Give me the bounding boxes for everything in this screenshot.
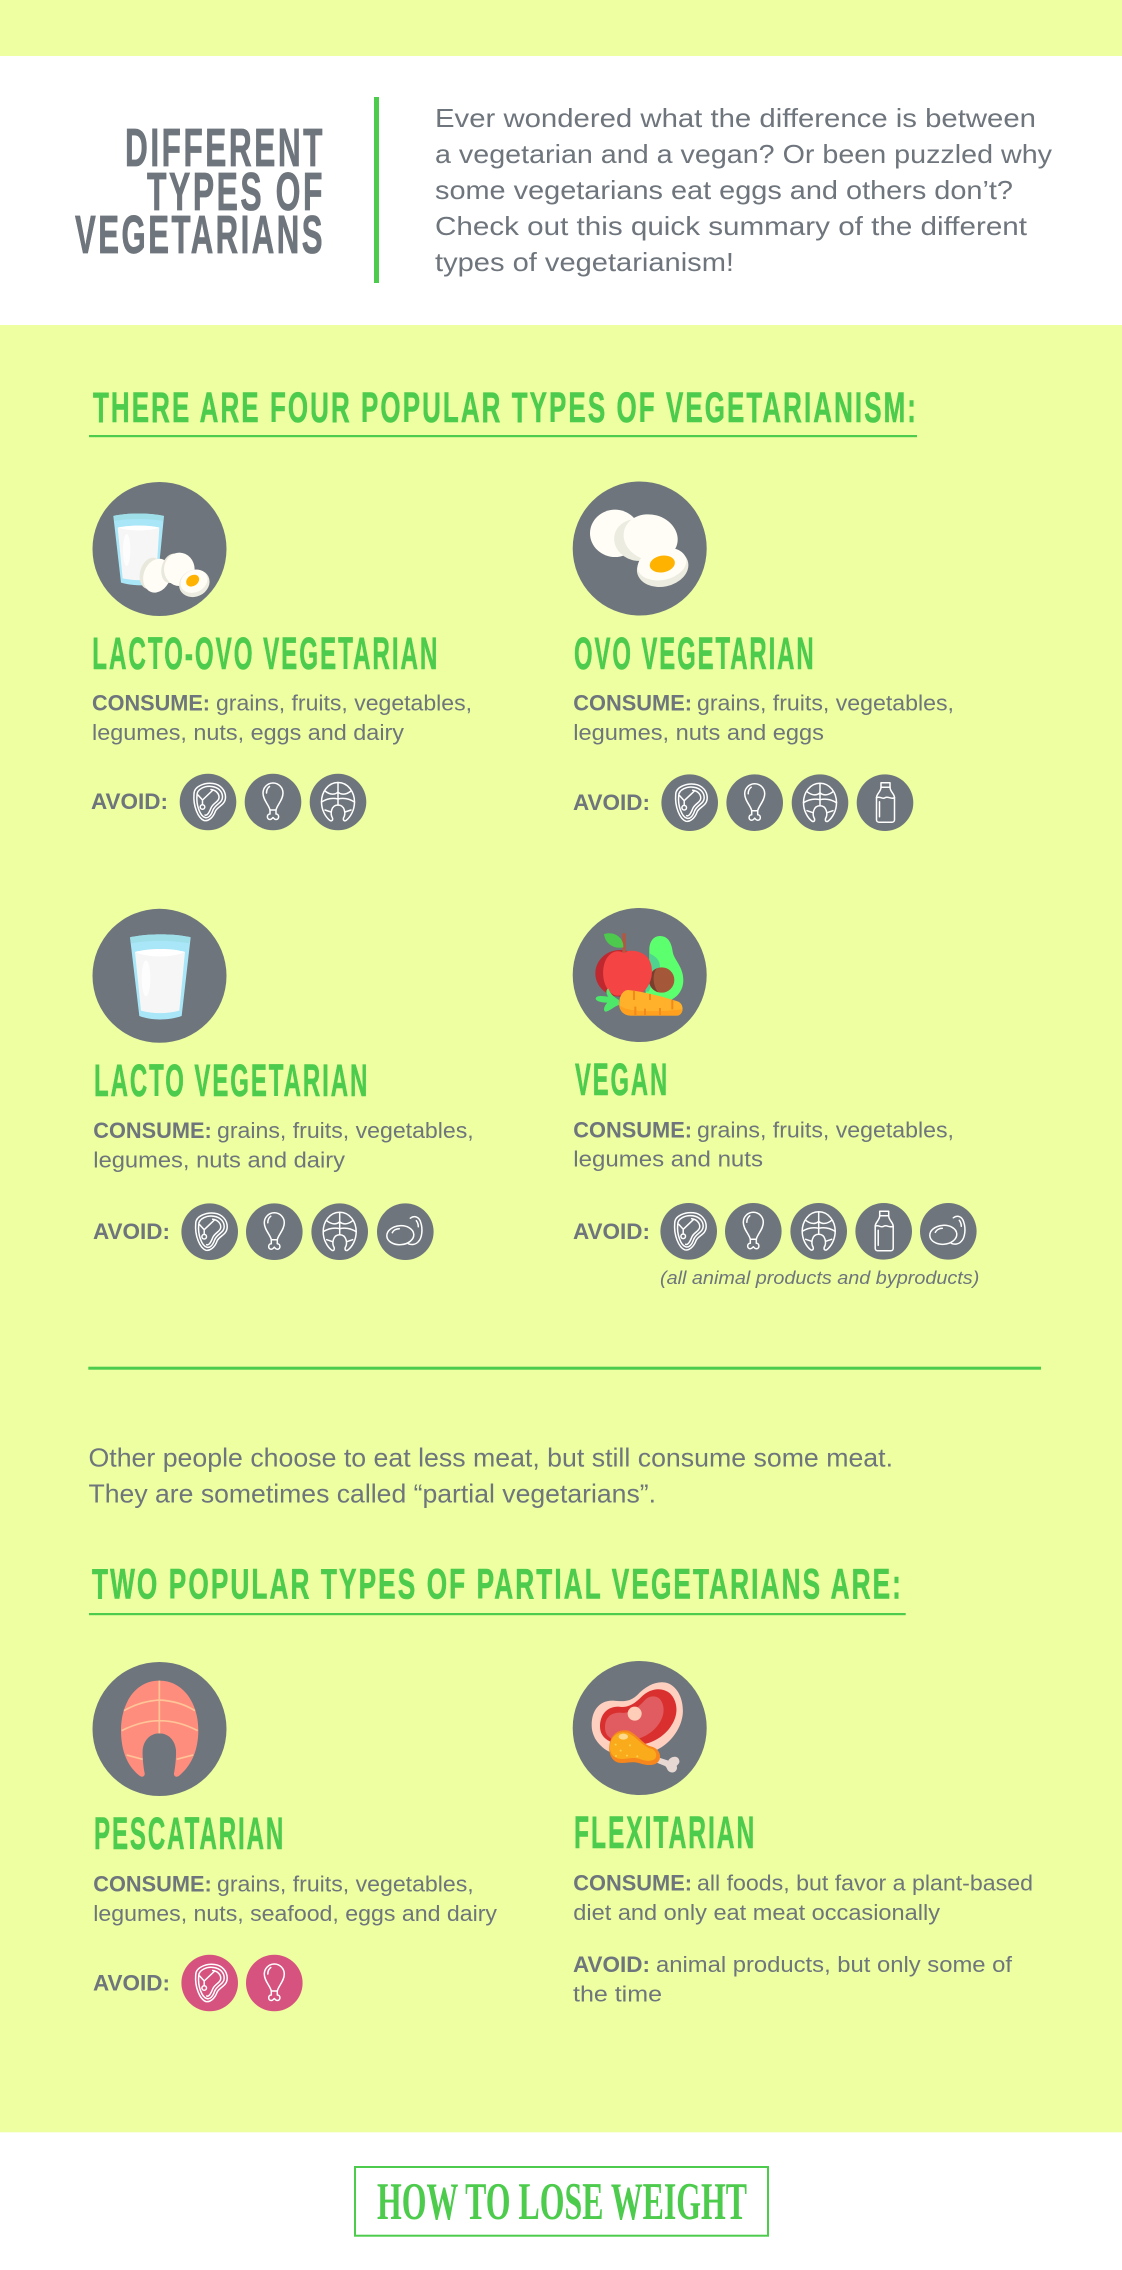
consume text: legumes, nuts and eggs	[573, 720, 824, 745]
consume text: grains, fruits, vegetables,	[217, 1872, 474, 1897]
avoid text	[573, 1952, 1013, 2007]
panel: header band	[0, 56, 1122, 325]
footer logo: HOW TO LOSE WEIGHT	[377, 2173, 747, 2231]
avoid row: AVOID:	[93, 1219, 170, 1244]
panel: lacto-ovo vegetarian	[91, 482, 472, 830]
consume text: CONSUME:	[93, 1118, 212, 1143]
title: TYPES OF	[147, 162, 325, 222]
title: VEGETARIANS	[75, 205, 325, 265]
partial vegetarians text: They are sometimes called “partial vegetarians”.	[88, 1479, 656, 1509]
partial vegetarians text: Other people choose to eat less meat, but still consume some meat.	[88, 1443, 893, 1473]
intro text: types of vegetarianism!	[435, 247, 734, 277]
intro text: some vegetarians eat eggs and others don’t?	[435, 175, 1013, 205]
consume text	[93, 1118, 474, 1173]
avoid row	[91, 774, 366, 830]
partial vegetarians text	[88, 1443, 893, 1509]
icon: milk and eggs	[92, 482, 226, 616]
consume text: legumes and nuts	[573, 1147, 763, 1172]
avoid text: animal products, but only some of	[656, 1952, 1013, 1977]
consume text: CONSUME:	[93, 1872, 212, 1897]
consume text: all foods, but favor a plant-based	[697, 1871, 1033, 1896]
intro text: Ever wondered what the difference is between	[435, 103, 1036, 133]
panel: flexitarian	[573, 1661, 1033, 2007]
name: LACTO VEGETARIAN	[94, 1055, 369, 1106]
icon: milk glass	[92, 909, 226, 1043]
avoid row	[93, 1203, 434, 1260]
panel: ovo vegetarian	[573, 482, 954, 831]
consume text: grains, fruits, vegetables,	[217, 1118, 474, 1143]
avoid row: AVOID:	[91, 789, 168, 814]
title: DIFFERENT	[125, 118, 325, 178]
intro text	[435, 103, 1052, 277]
name: FLEXITARIAN	[574, 1807, 756, 1858]
avoid row: AVOID:	[573, 1219, 650, 1244]
footer logo	[355, 2167, 768, 2236]
panel: pescatarian	[92, 1662, 498, 2011]
consume text: grains, fruits, vegetables,	[697, 691, 954, 716]
consume text	[573, 691, 954, 745]
avoid text: AVOID:	[573, 1952, 650, 1977]
consume text: grains, fruits, vegetables,	[697, 1117, 954, 1142]
consume text: legumes, nuts, eggs and dairy	[92, 720, 405, 745]
consume text: CONSUME:	[573, 1871, 692, 1896]
intro text: Check out this quick summary of the different	[435, 211, 1028, 241]
avoid row: AVOID:	[93, 1971, 170, 1996]
consume text: legumes, nuts and dairy	[93, 1148, 346, 1173]
consume text: legumes, nuts, seafood, eggs and dairy	[93, 1901, 498, 1926]
panel: vegan	[573, 908, 979, 1288]
name: OVO VEGETARIAN	[574, 628, 816, 679]
consume text	[93, 1872, 498, 1926]
name: VEGAN	[575, 1054, 669, 1105]
avoid row	[93, 1955, 303, 2011]
consume text	[92, 691, 472, 745]
consume text: CONSUME:	[573, 691, 692, 716]
consume text	[573, 1871, 1033, 1925]
avoid row: AVOID:	[573, 790, 650, 815]
consume text: grains, fruits, vegetables,	[216, 691, 472, 716]
consume text: diet and only eat meat occasionally	[573, 1900, 941, 1925]
avoid row	[573, 774, 913, 831]
avoid row	[573, 1203, 977, 1260]
consume text	[573, 1117, 954, 1172]
name: LACTO-OVO VEGETARIAN	[92, 628, 439, 679]
panel: lacto vegetarian	[92, 909, 474, 1260]
name: PESCATARIAN	[94, 1808, 285, 1859]
title	[75, 118, 325, 265]
icon: meat and drumstick	[573, 1661, 707, 1795]
icon: salmon steak	[92, 1662, 226, 1796]
consume text: CONSUME:	[92, 691, 210, 716]
consume text: CONSUME:	[573, 1117, 692, 1142]
icon: fruit and vegetables	[573, 908, 707, 1042]
icon: eggs	[573, 482, 707, 616]
note: (all animal products and byproducts)	[660, 1267, 979, 1288]
avoid text: the time	[573, 1982, 662, 2007]
intro text: a vegetarian and a vegan? Or been puzzled why	[435, 139, 1052, 169]
panel: footer band	[0, 2132, 1122, 2270]
